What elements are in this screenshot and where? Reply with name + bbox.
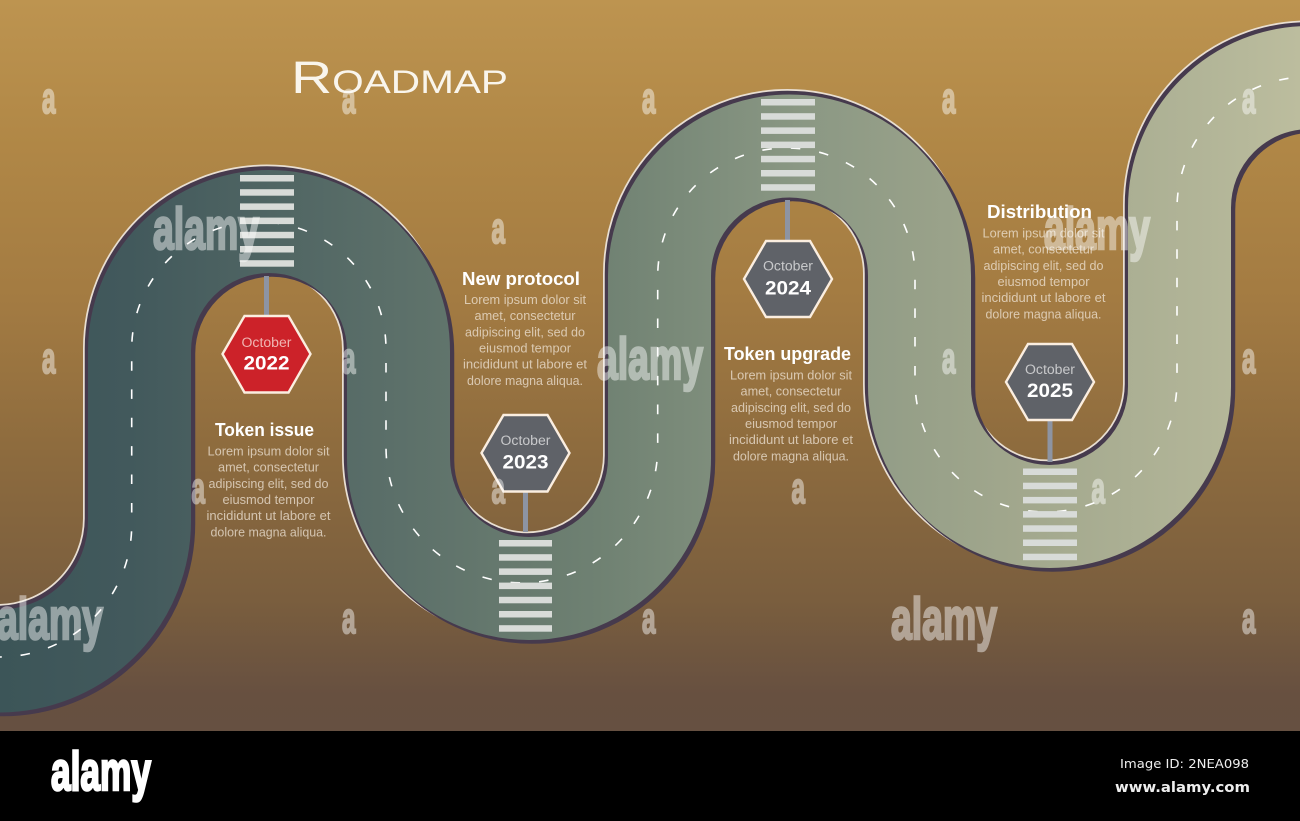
road sign: October 2023: 2023 bbox=[502, 452, 548, 474]
text block: Distribution bbox=[982, 202, 1106, 322]
road sign: October 2022 bbox=[222, 276, 310, 392]
road sign: October 2022: 2022 bbox=[244, 354, 290, 374]
text block: Token issue: Lorem ipsum dolor sit bbox=[208, 444, 330, 458]
watermark: small a marks: a bbox=[942, 74, 956, 123]
road sign: October 2024 bbox=[744, 200, 832, 317]
watermark: large alamy marks: alamy bbox=[891, 587, 997, 652]
road sign: October 2024: 2024 bbox=[765, 278, 811, 300]
footer logo: alamy bbox=[51, 740, 151, 802]
footer bar bbox=[0, 731, 1300, 821]
text block: Token issue: Token issue bbox=[215, 420, 314, 440]
text block: New protocol: incididunt ut labore et bbox=[463, 358, 588, 372]
road sign: October 2025 bbox=[1006, 344, 1094, 462]
crosswalk 2023 bbox=[499, 540, 552, 632]
watermark: large alamy marks: alamy bbox=[0, 587, 103, 652]
crosswalk 2025 bbox=[1023, 468, 1077, 560]
text block: New protocol: Lorem ipsum dolor sit bbox=[464, 293, 587, 307]
text block: Token issue: adipiscing elit, sed do bbox=[208, 477, 329, 491]
winding road bbox=[0, 75, 1300, 664]
watermark: small a marks: a bbox=[492, 464, 505, 513]
text block: Token issue: amet, consectetur bbox=[218, 461, 319, 475]
text block: New protocol: dolore magna aliqua. bbox=[467, 374, 583, 388]
text block: New protocol: adipiscing elit, sed do bbox=[465, 326, 585, 340]
footer image id: Image ID: 2NEA098 bbox=[1120, 756, 1249, 771]
text block: Token issue: dolore magna aliqua. bbox=[210, 526, 326, 540]
watermark: small a marks: a bbox=[342, 594, 356, 643]
watermark: small a marks: a bbox=[342, 74, 356, 123]
text block: Token issue bbox=[206, 420, 331, 540]
text block: Token issue: eiusmod tempor bbox=[222, 493, 314, 507]
watermark: small a marks: a bbox=[1242, 594, 1256, 643]
crosswalk 2022 bbox=[240, 175, 294, 267]
road sign: October 2023: October bbox=[500, 433, 551, 448]
text block: Distribution: amet, consectetur bbox=[993, 243, 1094, 257]
watermark: large alamy marks bbox=[0, 197, 1150, 652]
text block: Token upgrade: Token upgrade bbox=[724, 344, 851, 364]
text block: Token upgrade: eiusmod tempor bbox=[745, 417, 837, 431]
text block: Distribution: Lorem ipsum dolor sit bbox=[982, 226, 1105, 240]
text block: Distribution: adipiscing elit, sed do bbox=[984, 259, 1104, 273]
text block: Distribution: incididunt ut labore et bbox=[982, 291, 1106, 305]
watermark: small a marks: a bbox=[42, 74, 56, 123]
text block: Token upgrade: Lorem ipsum dolor sit bbox=[730, 368, 853, 382]
crosswalk 2024 bbox=[761, 99, 815, 191]
watermark: small a marks: a bbox=[642, 74, 656, 123]
watermark: small a marks: a bbox=[42, 334, 56, 383]
title: R OADMAP bbox=[291, 52, 508, 103]
text block: Distribution: dolore magna aliqua. bbox=[986, 308, 1102, 322]
watermark: small a marks: a bbox=[642, 594, 656, 643]
watermark: small a marks: a bbox=[942, 334, 956, 383]
watermark: small a marks: a bbox=[1092, 464, 1105, 513]
road sign: October 2025: October bbox=[1025, 362, 1076, 377]
watermark: small a marks: a bbox=[1242, 334, 1256, 383]
text block: New protocol: New protocol bbox=[462, 269, 580, 289]
watermark: small a marks: a bbox=[492, 204, 505, 253]
text block: New protocol: amet, consectetur bbox=[474, 309, 576, 323]
road sign: October 2022: October bbox=[242, 335, 292, 350]
text block: Token upgrade bbox=[724, 344, 854, 464]
text block: Distribution: eiusmod tempor bbox=[998, 275, 1090, 289]
text block: Token upgrade: incididunt ut labore et bbox=[729, 433, 854, 447]
watermark: small a marks bbox=[42, 74, 1256, 643]
text block: Token issue: incididunt ut labore et bbox=[206, 509, 331, 523]
watermark: small a marks: a bbox=[192, 464, 205, 513]
text block: New protocol: eiusmod tempor bbox=[479, 342, 571, 356]
text block: Token upgrade: dolore magna aliqua. bbox=[733, 450, 849, 464]
text block: New protocol bbox=[462, 269, 588, 388]
watermark: large alamy marks: alamy bbox=[153, 197, 259, 262]
watermark: small a marks: a bbox=[1242, 74, 1256, 123]
road sign: October 2023 bbox=[482, 415, 570, 532]
watermark: small a marks: a bbox=[792, 464, 805, 513]
footer url: www.alamy.com bbox=[1115, 780, 1250, 796]
text block: Token upgrade: amet, consectetur bbox=[740, 385, 842, 399]
text block: Distribution: Distribution bbox=[987, 202, 1092, 222]
text block: Token upgrade: adipiscing elit, sed do bbox=[731, 401, 851, 415]
watermark: large alamy marks: alamy bbox=[1044, 197, 1150, 262]
road sign: October 2025: 2025 bbox=[1027, 381, 1073, 402]
watermark: small a marks: a bbox=[342, 334, 356, 383]
road sign: October 2024: October bbox=[763, 258, 814, 274]
watermark: large alamy marks: alamy bbox=[597, 327, 703, 392]
